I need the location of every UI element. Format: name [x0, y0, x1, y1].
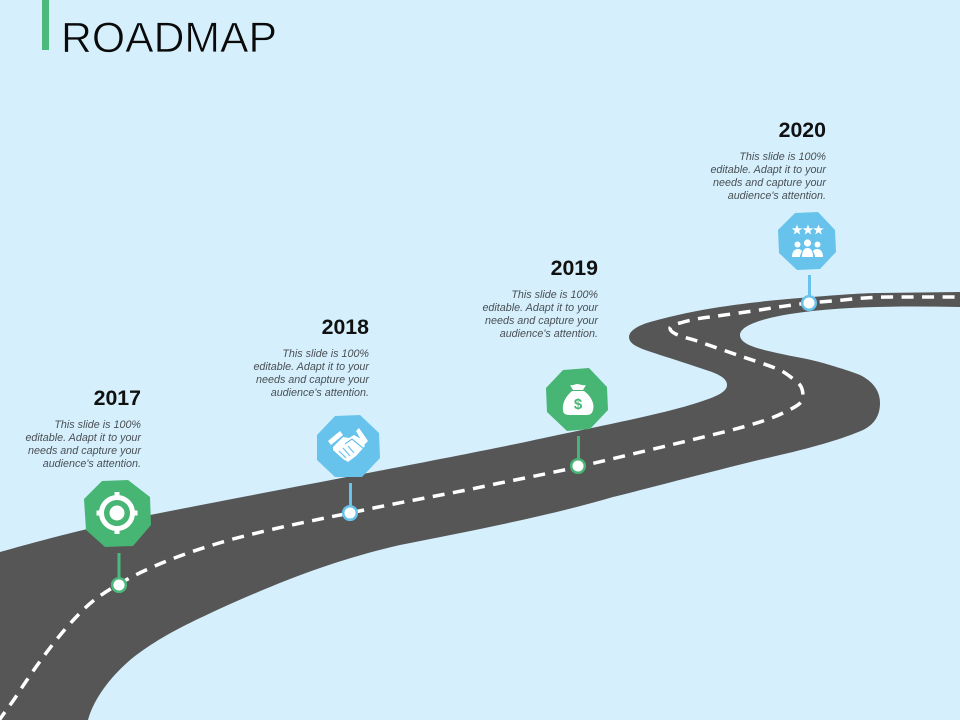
title accent bar [42, 0, 49, 50]
road centre dashed line [0, 297, 960, 720]
description 2019: needs and capture your [485, 315, 598, 327]
connector 2018 [343, 483, 357, 520]
description 2019: audience's attention. [500, 328, 598, 340]
title: ROADMAP [61, 14, 277, 62]
icon: target [84, 480, 151, 547]
connector 2019 [571, 436, 585, 473]
year 2020: 2020 [779, 118, 826, 142]
icon: team and stars [778, 212, 836, 270]
icon: money bag [546, 368, 608, 431]
winding road [0, 292, 960, 720]
description 2019: This slide is 100% [511, 289, 598, 301]
year 2017: 2017 [94, 386, 141, 410]
connector 2020 [802, 275, 816, 310]
description 2017: needs and capture your [28, 445, 141, 457]
description 2020: audience's attention. [728, 190, 826, 202]
description 2018: audience's attention. [271, 387, 369, 399]
description 2017: audience's attention. [43, 458, 141, 470]
description 2018: editable. Adapt it to your [253, 361, 369, 373]
milestone 2020 [710, 118, 836, 310]
description 2018: needs and capture your [256, 374, 369, 386]
milestone 2017 [25, 386, 151, 592]
description 2020: This slide is 100% [739, 151, 826, 163]
description 2020: needs and capture your [713, 177, 826, 189]
description 2017: This slide is 100% [54, 419, 141, 431]
description 2018: This slide is 100% [282, 348, 369, 360]
year 2019: 2019 [551, 256, 598, 280]
connector 2017 [112, 553, 126, 592]
description 2017: editable. Adapt it to your [25, 432, 141, 444]
description 2020: editable. Adapt it to your [710, 164, 826, 176]
icon: money bag: $ [574, 396, 583, 413]
icon: handshake [317, 415, 380, 477]
milestone 2018 [253, 315, 380, 520]
year 2018: 2018 [322, 315, 369, 339]
description 2019: editable. Adapt it to your [482, 302, 598, 314]
milestone 2019 [482, 256, 608, 473]
